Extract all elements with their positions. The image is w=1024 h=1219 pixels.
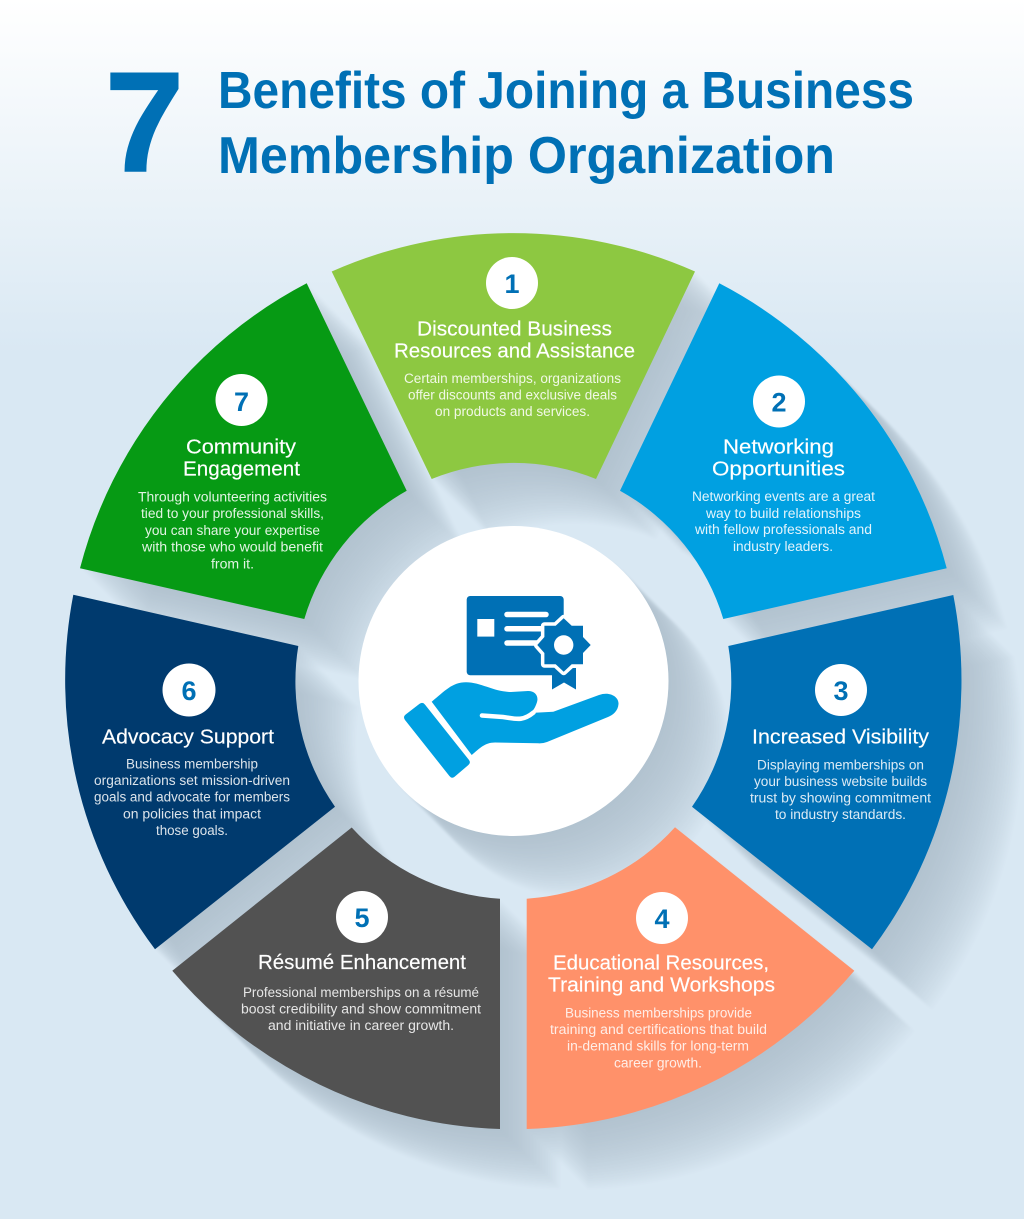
heading 2: Networking — [723, 435, 834, 458]
icon: cuff — [404, 703, 470, 778]
body 6: organizations set mission-driven — [94, 773, 290, 788]
heading 1: Discounted Business — [417, 317, 612, 340]
body 5: boost credibility and show commitment — [241, 1002, 481, 1016]
body 3: to industry standards. — [775, 807, 906, 822]
number badge 3 — [815, 664, 867, 716]
body 2: way to build relationships — [705, 506, 861, 521]
icon: seal badge — [537, 618, 591, 672]
number badge 5 — [336, 891, 388, 943]
heading 3: Increased Visibility — [752, 725, 930, 748]
heading 4: Training and Workshops — [548, 973, 775, 996]
body 6: on policies that impact — [123, 806, 261, 821]
body 4: Business memberships provide — [565, 1006, 752, 1020]
body 7: Through volunteering activities — [138, 490, 327, 504]
icon: hand holding certificate — [404, 596, 619, 778]
panel: 2 Networking Opportunities — [620, 283, 947, 619]
icon: hand — [432, 682, 619, 755]
body 2: with fellow professionals and — [694, 522, 872, 537]
body 7: you can share your expertise — [145, 523, 320, 538]
number badge 7: 7 — [234, 387, 249, 417]
body 3: trust by showing commitment — [750, 790, 931, 806]
heading 7: Community — [186, 436, 297, 458]
body 5: and initiative in career growth. — [268, 1018, 454, 1033]
title text: Membership Organization — [218, 127, 835, 185]
number badge 6: 6 — [181, 676, 197, 706]
number badge 4 — [636, 892, 688, 944]
number badge 1 — [486, 257, 538, 309]
number badge 5: 5 — [354, 903, 370, 933]
title — [105, 43, 914, 202]
number badge 7 — [216, 374, 268, 426]
body 7: from it. — [211, 556, 254, 572]
heading 1: Resources and Assistance — [394, 339, 635, 362]
long drop shadows of wheel segments — [68, 236, 1021, 1189]
icon: ribbon — [552, 668, 576, 690]
body 2: Networking events are a great — [692, 489, 875, 504]
body 4: in-demand skills for long-term — [567, 1038, 749, 1054]
icon: card photo square — [477, 619, 494, 637]
body 6: Business membership — [126, 756, 258, 771]
big numeral 7: 7 — [105, 43, 184, 202]
heading 4: Educational Resources, — [553, 951, 769, 974]
body 4: career growth. — [614, 1056, 702, 1070]
body 6: those goals. — [156, 823, 228, 838]
body 4: training and certifications that build — [550, 1022, 767, 1037]
number badge 1: 1 — [504, 269, 520, 299]
heading 2: Opportunities — [712, 457, 845, 480]
panel: 6 Advocacy Support — [65, 595, 335, 949]
center circle — [358, 526, 668, 836]
icon: card text lines — [507, 614, 546, 643]
number badge 2: 2 — [771, 388, 787, 418]
number badge 6 — [162, 664, 216, 716]
panel: 5 Résumé Enhancement — [172, 828, 500, 1129]
number badge 4: 4 — [654, 904, 670, 934]
title text: Benefits of Joining a Business — [218, 62, 914, 120]
panel: 4 Educational Resources, Training and Workshops — [527, 827, 854, 1129]
body 1: offer discounts and exclusive deals — [408, 388, 617, 402]
number badge 3: 3 — [833, 676, 849, 706]
heading 7: Engagement — [183, 458, 300, 480]
icon: certificate card — [467, 596, 564, 675]
icon: seal centre hole — [554, 635, 573, 655]
body 5: Professional memberships on a résumé — [243, 985, 479, 1000]
body 2: industry leaders. — [733, 539, 833, 554]
panel: 3 Increased Visibility — [692, 595, 961, 949]
body 3: Displaying memberships on — [757, 758, 924, 772]
body 1: on products and services. — [435, 404, 590, 419]
panel: 1 Discounted Business Resources and Assistance — [332, 233, 695, 479]
body 6: goals and advocate for members — [94, 790, 290, 805]
heading 6: Advocacy Support — [102, 725, 274, 748]
body 7: tied to your professional skills, — [141, 506, 324, 521]
number badge 2 — [753, 376, 805, 428]
heading 5: Résumé Enhancement — [258, 951, 466, 974]
body 7: with those who would benefit — [141, 540, 323, 554]
body 3: your business website builds — [754, 774, 927, 789]
panel: 7 Community Engagement — [80, 283, 407, 619]
body 1: Certain memberships, organizations — [404, 371, 621, 386]
icon: thumb separator — [482, 712, 534, 719]
